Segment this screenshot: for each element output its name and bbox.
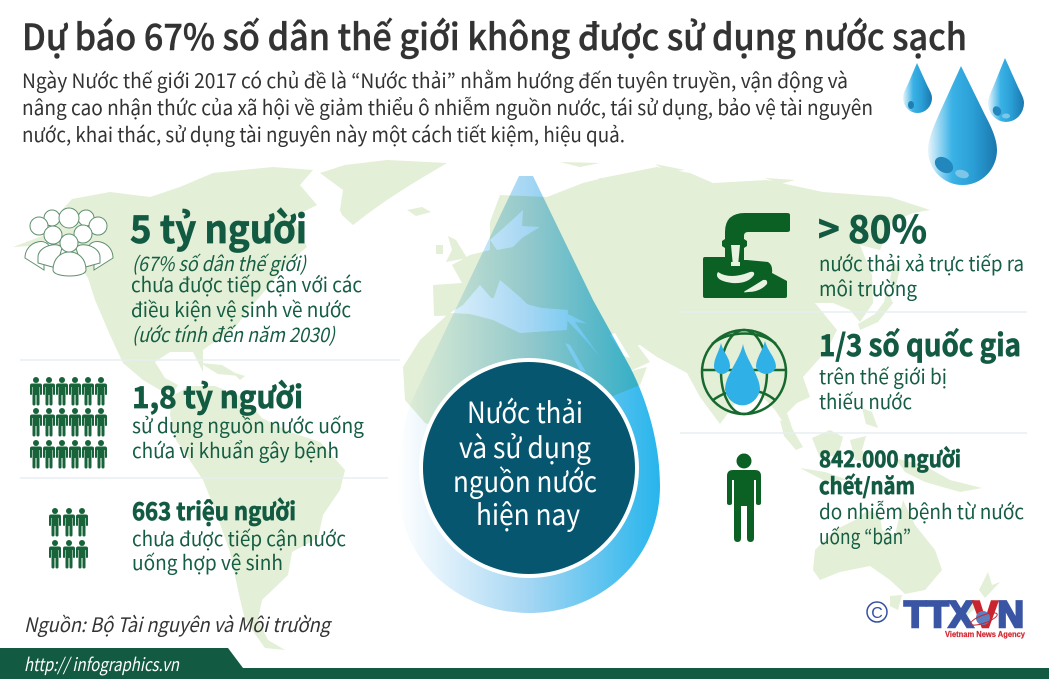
icon: globe with water drops	[702, 330, 786, 414]
logo: TTXVN Vietnam News Agency: TTXVN	[904, 594, 1024, 635]
intro paragraph: nước, khai thác, sử dụng tài nguyên này một cách tiết kiệm, hiệu quả.	[22, 119, 625, 148]
North America	[13, 167, 317, 394]
New Guinea	[895, 458, 982, 492]
stat: 1.8 billion people: sử dụng nguồn nước uống	[132, 410, 364, 439]
Iceland	[407, 207, 431, 216]
world map	[13, 160, 1000, 650]
stat: 5 billion people	[130, 199, 362, 348]
stat: 1.8 billion people: chứa vi khuẩn gây bệnh	[132, 435, 339, 464]
stat: over 80 percent: nước thải xả trực tiếp ra	[819, 248, 1024, 277]
stat: one third of countries: 1/3 số quốc gia	[819, 321, 1021, 365]
logo: TTXVN Vietnam News Agency: Vietnam News Agency	[945, 630, 1026, 639]
Sumatra	[780, 420, 803, 450]
Sulawesi	[850, 436, 868, 462]
stat: one third of countries: trên thế giới bị	[819, 361, 947, 390]
logo: TTXVN Vietnam News Agency	[867, 594, 1026, 639]
Africa	[403, 314, 647, 520]
Borneo	[812, 430, 843, 458]
Philippines	[862, 408, 878, 428]
stat: 842,000 deaths per year: do nhiễm bệnh từ nước	[819, 496, 1024, 525]
stat: 5 billion people: chưa được tiếp cận với các	[131, 269, 362, 298]
central circle: và sử dụng	[459, 425, 591, 467]
footer band	[0, 648, 1049, 679]
Tasmania	[890, 595, 902, 610]
source note: Nguồn: Bộ Tài nguyên và Môi trường	[24, 609, 332, 638]
icon: crowd of people	[25, 208, 113, 276]
stat: over 80 percent	[818, 199, 1024, 302]
Europe and Asia	[433, 167, 930, 442]
stat: 5 billion people: (67% số dân thế giới)	[132, 248, 307, 277]
seas cut out of the map	[450, 210, 630, 372]
footer band: http:// infographics.vn	[24, 651, 180, 677]
icon: people grid of six	[49, 508, 88, 568]
central circle: hiện nay	[476, 492, 580, 534]
logo: TTXVN Vietnam News Agency: C	[871, 605, 883, 622]
stat: 663 million people: chưa được tiếp cận nước	[132, 523, 346, 552]
stat: 663 million people	[132, 492, 346, 576]
Caribbean islands	[200, 363, 245, 380]
Japan	[858, 290, 893, 330]
central circle: Nước thải	[467, 390, 583, 432]
Arctic islands of Asia	[560, 162, 795, 198]
central circle	[421, 360, 637, 576]
icon: people grid of eighteen	[30, 377, 107, 468]
intro paragraph: nâng cao nhận thức của xã hội về giảm thiểu ô nhiễm nguồn nước, tái sử dụng, bảo vệ tài nguyên	[22, 92, 873, 121]
intro paragraph: Ngày Nước thế giới 2017 có chủ đề là “Nước thải” nhằm hướng đến tuyên truyền, vận động và	[22, 65, 848, 94]
stat: 5 billion people: 5 tỷ người	[130, 199, 307, 254]
UK and Ireland	[436, 236, 467, 262]
faint map lines and dividers	[20, 312, 1027, 478]
stat: 842,000 deaths per year: chết/năm	[819, 469, 915, 501]
New Zealand	[952, 572, 1000, 622]
Australia	[813, 500, 942, 594]
Arabia	[575, 322, 650, 378]
stat: one third of countries: thiếu nước	[819, 386, 912, 415]
stat: 1.8 billion people: 1,8 tỷ người	[132, 373, 303, 417]
icon: three water drops	[903, 58, 1024, 185]
title: Dự báo 67% số dân thế giới không được sử dụng nước sạch	[22, 9, 967, 61]
intro paragraph	[22, 65, 873, 148]
Sakhalin	[890, 262, 900, 290]
icon: single person	[727, 454, 761, 542]
stat: 663 million people: uống hợp vệ sinh	[132, 547, 283, 576]
central water drop	[398, 176, 660, 613]
stat: over 80 percent: > 80%	[818, 199, 927, 254]
stat: 5 billion people: điều kiện vệ sinh về nước	[131, 294, 351, 323]
South America	[170, 386, 345, 650]
stat: one third of countries	[819, 321, 1021, 415]
stat: 842,000 deaths per year: 842.000 người	[819, 442, 961, 474]
stat: 842,000 deaths per year: uống “bẩn”	[819, 521, 911, 550]
stat: over 80 percent: môi trường	[819, 273, 917, 302]
Greenland	[320, 160, 447, 225]
icon: wastewater pipe	[703, 213, 790, 298]
stat: 5 billion people: (ước tính đến năm 2030)	[132, 319, 336, 348]
stat: 842,000 deaths per year	[819, 442, 1024, 550]
stat: 1.8 billion people	[132, 373, 364, 464]
central circle: nguồn nước	[453, 459, 597, 501]
stat: 663 million people: 663 triệu người	[132, 492, 296, 527]
Java	[800, 468, 848, 481]
